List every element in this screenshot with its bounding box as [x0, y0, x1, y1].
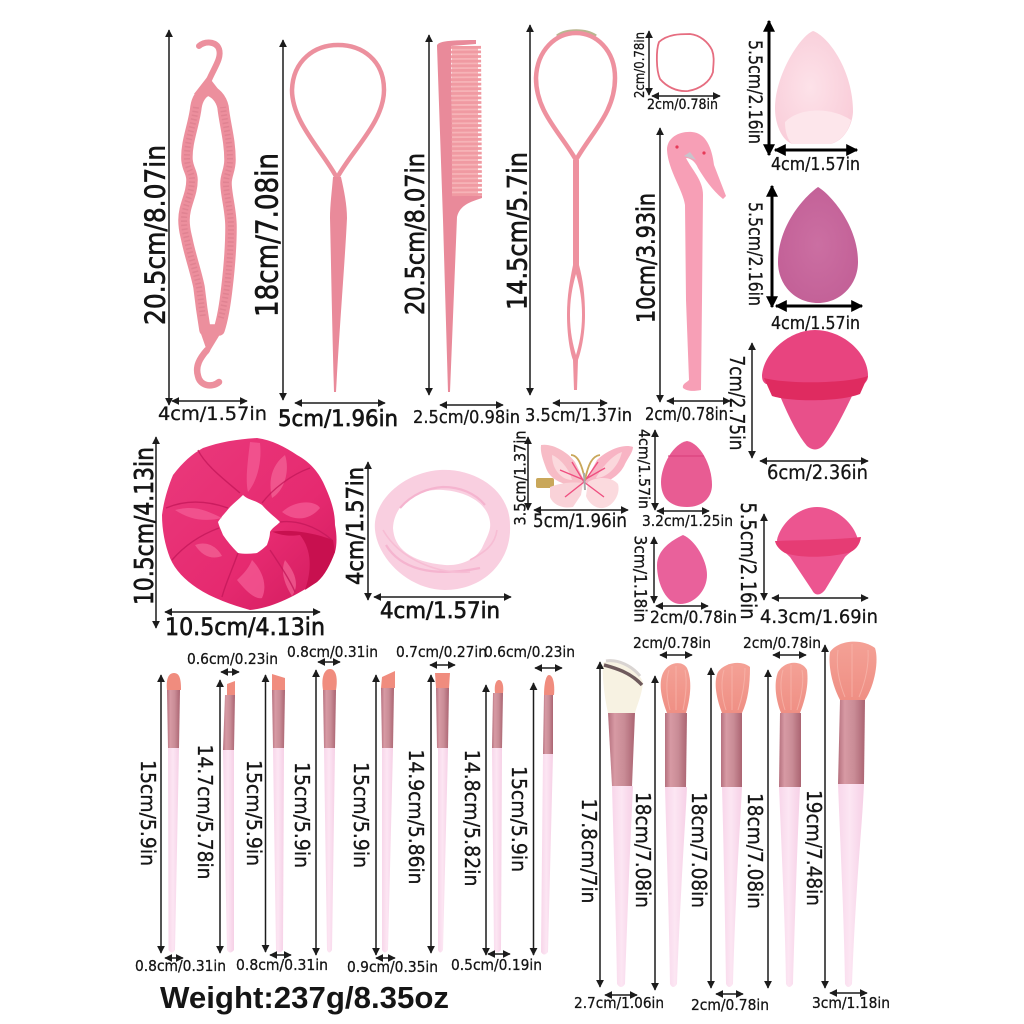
product: topsy tail loop small	[502, 25, 632, 426]
brush group: small eye brushes	[135, 643, 575, 976]
brush 2	[193, 680, 235, 953]
icon: flamingo elastic cutter	[667, 132, 726, 391]
dimension: height 3cm: 3cm/1.18in	[630, 536, 650, 622]
dimension: height 5.5cm: 5.5cm/2.16in	[744, 40, 766, 144]
dimension: height 3.5cm: 3.5cm/1.37in	[510, 430, 530, 526]
product: small triangle puff	[736, 502, 878, 628]
icon: elastic ring	[657, 34, 714, 91]
dimension: height 10cm: 10cm/3.93in	[632, 193, 660, 323]
product: elastic band	[632, 31, 720, 113]
dimension: height 14.5cm: 14.5cm/5.7in	[502, 152, 534, 310]
brush 4: rounded coral tip: 18cm/7.08in	[743, 793, 767, 909]
dimension: width 2cm: 2cm/0.78in	[650, 608, 737, 627]
brush 1: angled white tip: 17.8cm/7in	[577, 798, 601, 904]
icon: mini sponge	[661, 441, 712, 507]
brush 6: 14.9cm/5.86in	[404, 750, 428, 884]
product: topsy tail loop large	[250, 40, 398, 432]
icon: loop tool	[536, 31, 615, 390]
bottom width labels: 2.7cm/1.06in	[574, 994, 664, 1012]
dimension: width 2cm: 2cm/0.78in	[647, 97, 718, 113]
icon: beauty sponge	[775, 31, 853, 144]
brush 3: rounded coral tip: 18cm/7.08in	[687, 792, 711, 908]
dimension: width 3.5cm: 3.5cm/1.37in	[525, 405, 632, 426]
icon: braid hook tool	[184, 43, 231, 385]
icon: satin scrunchie	[162, 438, 336, 610]
dimension: height 2cm: 2cm/0.78in	[632, 32, 648, 98]
bottom width labels: 0.8cm/0.31in	[135, 957, 226, 975]
icon: velvet triangle puff	[775, 507, 861, 594]
dimension: height 18cm: 18cm/7.08in	[250, 153, 286, 317]
brush 8	[507, 675, 554, 955]
dimension: height 5.5cm: 5.5cm/2.16in	[744, 202, 766, 306]
dimension: height 20.5cm: 20.5cm/8.07in	[138, 145, 172, 325]
brush 1: 15cm/5.9in	[136, 760, 160, 866]
brush 5: large coral tip	[802, 642, 877, 988]
product: hair hook tool	[138, 30, 267, 425]
product: light pink sponge	[744, 21, 860, 175]
dimension: height 7cm: 7cm/2.75in	[725, 356, 749, 450]
icon: loop tool	[292, 45, 384, 392]
dimension: height 4cm: 4cm/1.57in	[635, 429, 653, 509]
dimension: width 4.3cm: 4.3cm/1.69in	[760, 606, 878, 628]
top width labels	[187, 643, 575, 672]
brush 1: angled white tip	[577, 660, 643, 987]
brush 4: rounded coral tip	[743, 663, 808, 988]
dimension: height 20.5cm: 20.5cm/8.07in	[401, 153, 431, 315]
bottom width labels	[135, 954, 542, 976]
bottom width labels: 0.9cm/0.35in	[347, 958, 438, 976]
top width labels	[633, 634, 821, 655]
dimension: width 5cm: 5cm/1.96in	[278, 407, 398, 432]
icon: terry hair band	[375, 470, 510, 590]
product: scrunchie	[130, 437, 336, 641]
brush 5: large coral tip: 19cm/7.48in	[802, 790, 826, 906]
brush 3: 15cm/5.9in	[242, 760, 266, 866]
brush 2: rounded coral tip	[631, 663, 690, 990]
icon: tail comb	[437, 40, 482, 392]
dimension: width 2cm: 2cm/0.78in	[645, 405, 728, 425]
product: mini sponge teardrop	[630, 535, 737, 627]
dimension: width 4cm: 4cm/1.57in	[771, 155, 860, 175]
brush 2: 14.7cm/5.78in	[193, 744, 217, 880]
dimension: width 3.2cm: 3.2cm/1.25in	[642, 512, 733, 530]
icon: mini sponge	[657, 535, 707, 604]
brush 3	[242, 674, 285, 952]
brush 8: 15cm/5.9in	[507, 766, 531, 872]
dimension: width 2.5cm: 2.5cm/0.98in	[413, 407, 520, 428]
top width labels: 2cm/0.78in	[633, 634, 711, 652]
dimension: width 10.5cm: 10.5cm/4.13in	[165, 613, 325, 641]
dimension: height 10.5cm: 10.5cm/4.13in	[130, 447, 160, 605]
product: flamingo tool	[632, 128, 730, 425]
icon: velvet triangle puff	[762, 330, 868, 450]
product: large triangle puff	[725, 330, 868, 484]
brush 6	[404, 673, 450, 953]
brush 2: rounded coral tip: 18cm/7.08in	[631, 792, 655, 908]
icon: butterfly hair clip	[536, 445, 633, 508]
top width labels: 2cm/0.78in	[743, 634, 821, 652]
top width labels: 0.7cm/0.27in	[396, 643, 487, 661]
weight label: Weight:237g/8.35oz	[160, 980, 449, 1015]
dimension: height 4cm: 4cm/1.57in	[343, 467, 369, 585]
dimension: width 5cm: 5cm/1.96in	[533, 511, 627, 532]
product: towel headband	[343, 462, 511, 624]
top width labels: 0.6cm/0.23in	[187, 650, 278, 668]
bottom width labels: 3cm/1.18in	[812, 994, 890, 1012]
brush 3: rounded coral tip	[687, 663, 750, 988]
brush 5	[349, 671, 395, 955]
brush 7	[460, 680, 503, 955]
bottom width labels: 0.5cm/0.19in	[451, 956, 542, 974]
product: butterfly clip	[510, 430, 633, 532]
product: mini sponge egg	[635, 429, 733, 530]
brush 5: 15cm/5.9in	[349, 762, 373, 868]
brush group: large face brushes	[574, 634, 890, 1014]
dimension: height 5.5cm: 5.5cm/2.16in	[736, 502, 760, 620]
dimension: width 4cm	[771, 306, 862, 334]
bottom width labels: 0.8cm/0.31in	[236, 956, 328, 974]
bottom width labels	[574, 993, 890, 1014]
brush 1	[136, 673, 181, 953]
dimension: height 5.5cm	[744, 186, 772, 307]
brush 7: 14.8cm/5.82in	[460, 750, 484, 886]
brush 4: 15cm/5.9in	[290, 762, 314, 868]
dimension: width 4cm: 4cm/1.57in	[158, 403, 267, 425]
dimension: width 4cm: 4cm/1.57in	[771, 314, 860, 334]
top width labels: 0.6cm/0.23in	[484, 643, 575, 661]
brush 4	[290, 669, 337, 955]
product: mauve sponge	[744, 186, 862, 334]
top width labels: 0.8cm/0.31in	[287, 643, 378, 661]
dimension: width 6cm: 6cm/2.36in	[767, 461, 868, 484]
icon: beauty sponge	[778, 187, 858, 303]
product: tail comb	[401, 35, 520, 428]
dimension: width 4cm: 4cm/1.57in	[380, 599, 500, 624]
bottom width labels: 2cm/0.78in	[691, 996, 769, 1014]
